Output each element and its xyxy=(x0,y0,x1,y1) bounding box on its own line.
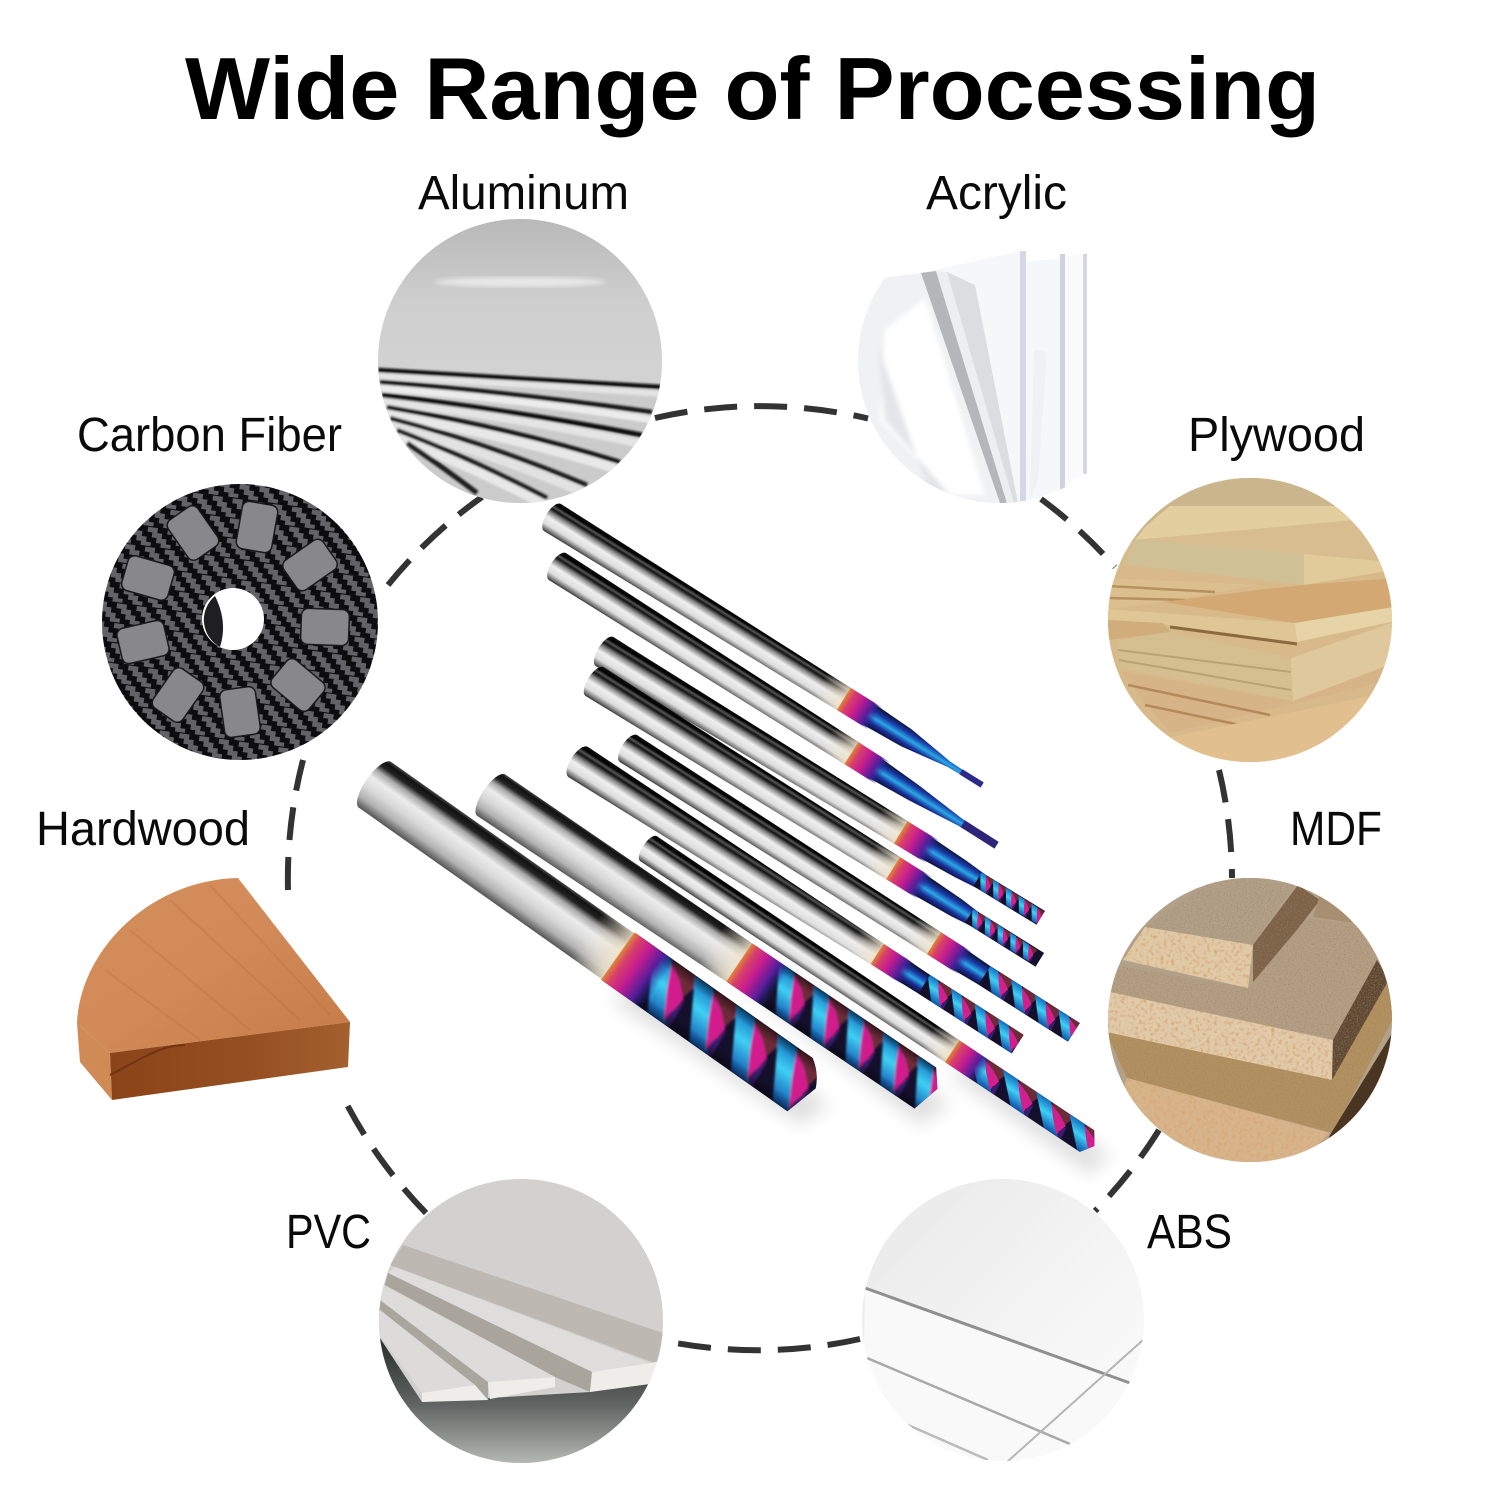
label: Hardwood: Hardwood xyxy=(36,803,250,856)
bit 9 xyxy=(357,761,817,1112)
centre hole xyxy=(202,588,264,650)
bit 1 xyxy=(538,500,991,799)
bit 4 xyxy=(580,663,1049,974)
bit 8 xyxy=(475,774,938,1108)
dashed ring connecting materials xyxy=(288,406,1232,1350)
label: Acrylic: Acrylic xyxy=(926,167,1067,220)
image: carbon fiber disc xyxy=(102,484,378,760)
label: MDF: MDF xyxy=(1290,803,1382,856)
image: MDF boards xyxy=(1106,878,1396,1165)
label: ABS: ABS xyxy=(1147,1206,1232,1259)
title: Wide Range of Processing xyxy=(185,39,1320,138)
image: aluminum sheets xyxy=(378,219,662,506)
label: PVC: PVC xyxy=(286,1206,371,1259)
label: Plywood: Plywood xyxy=(1188,409,1365,462)
image: ABS sheet xyxy=(862,1179,1144,1470)
soft shadow below bits xyxy=(610,965,1110,1175)
illustration: end mill bits xyxy=(350,500,1110,1175)
bit 7 xyxy=(635,833,1110,1163)
label: Carbon Fiber: Carbon Fiber xyxy=(77,409,342,462)
image: PVC boards xyxy=(378,1179,665,1463)
image: plywood stack xyxy=(1108,478,1400,770)
bit 6 xyxy=(562,743,1030,1061)
grey segments around the disc xyxy=(116,500,350,738)
bit 3 xyxy=(590,633,1051,933)
bit 5 xyxy=(614,731,1089,1050)
bit 2 xyxy=(543,549,1005,859)
label: Aluminum: Aluminum xyxy=(418,167,629,220)
image: acrylic sheets xyxy=(858,251,1087,503)
image: hardwood block xyxy=(77,878,350,1100)
